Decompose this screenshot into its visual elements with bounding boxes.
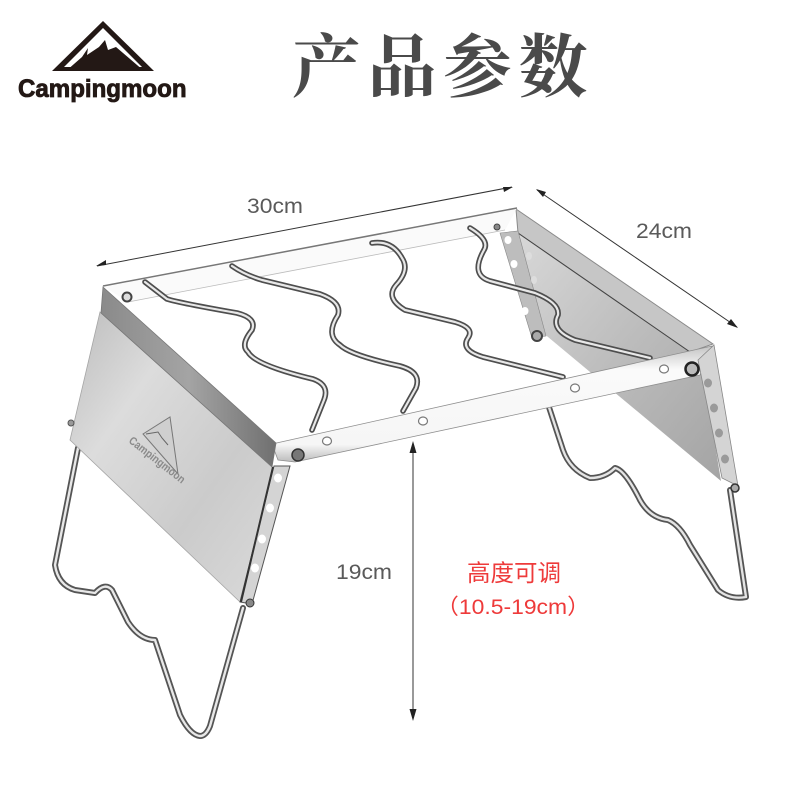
front rail <box>272 346 712 462</box>
logo: Campingmoon <box>18 21 187 102</box>
right leg wire <box>545 395 746 598</box>
rail holes <box>322 365 668 445</box>
label: 19cm: 19cm <box>336 560 392 584</box>
label: 24cm: 24cm <box>636 219 692 243</box>
left side panel <box>70 287 290 604</box>
right side panel <box>500 209 721 481</box>
back rail <box>103 208 517 302</box>
rack wires <box>145 228 650 430</box>
callout: adjustable height <box>436 560 590 619</box>
arrow: height 19cm <box>410 441 416 721</box>
arrow: depth 24cm <box>536 189 738 328</box>
embossed logo on left panel <box>126 417 187 486</box>
callout: adjustable height: （10.5-19cm） <box>436 595 590 619</box>
callout: adjustable height: 高度可调 <box>467 560 561 586</box>
product: folding stainless stand <box>55 208 746 736</box>
icon: mountain peak <box>66 40 144 71</box>
right end bracket with holes <box>698 345 738 486</box>
title: 产品参数 <box>292 30 594 106</box>
icon: mountain outline <box>52 21 154 71</box>
logo wordmark: Campingmoon <box>18 74 187 102</box>
embossed logo on left panel: Campingmoon <box>126 435 187 486</box>
left leg wire <box>55 448 243 736</box>
label: 30cm: 30cm <box>247 194 303 218</box>
arrow: width 30cm <box>96 187 513 266</box>
rivets and bolts <box>68 224 739 607</box>
